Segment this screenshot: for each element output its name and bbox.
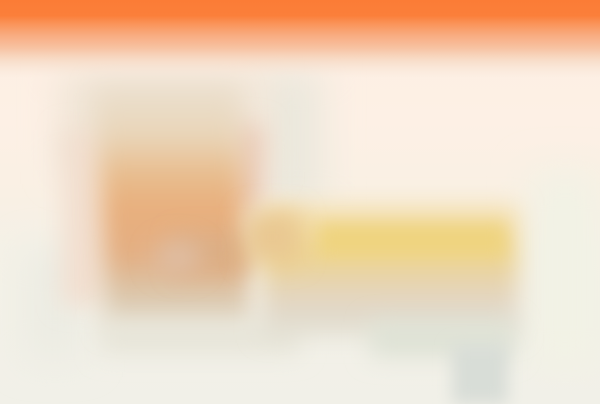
header band (0, 0, 600, 78)
panel: map region (60, 72, 265, 330)
map surround (60, 72, 265, 172)
connecting tint (245, 212, 300, 262)
panel: grey band left (100, 322, 300, 354)
map left edge (62, 130, 104, 305)
background tint: lower right (530, 170, 600, 370)
bar body (262, 205, 518, 335)
bar core (320, 225, 505, 255)
background tint: pale grey column (258, 70, 323, 210)
panel: grey-green band (370, 322, 515, 357)
panel: bottom-right block (452, 345, 508, 404)
map main body (95, 85, 252, 330)
map lower shade (175, 235, 250, 273)
panel: yellow bar and lower band (245, 205, 518, 335)
background tint: lower left grey (25, 250, 85, 360)
map pale spot (154, 241, 202, 275)
map right edge (228, 125, 264, 210)
